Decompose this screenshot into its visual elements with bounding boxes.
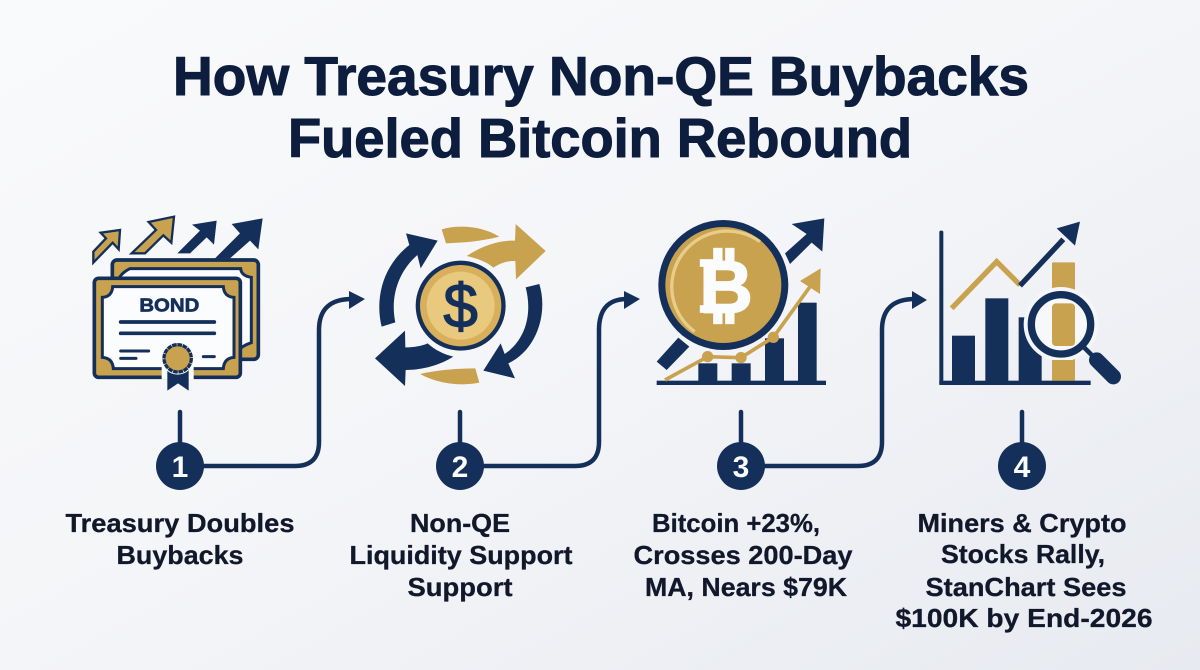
label: step 2: Non-QE	[410, 508, 510, 538]
icon: money cycle around dollar coin	[375, 224, 546, 386]
label: step 1: Treasury Doubles	[66, 508, 294, 538]
icon: bond certificates with rising arrows	[93, 217, 263, 391]
step badge 3: 3	[733, 451, 749, 484]
label: step 4: $100K by End-2026	[896, 603, 1152, 633]
label: step 3: Crosses 200-Day	[634, 540, 853, 570]
connector arrow: step 1 to step 2	[180, 291, 365, 466]
label: step 3	[634, 508, 853, 602]
step badge 4	[998, 442, 1046, 490]
label: step 4: Miners & Crypto	[918, 508, 1126, 538]
label: step 2: Liquidity Support	[350, 540, 573, 570]
label: step 1: Buybacks	[116, 540, 244, 570]
label: step 3: Bitcoin +23%,	[652, 508, 820, 538]
title: Fueled Bitcoin Rebound	[288, 107, 912, 169]
label: step 1	[66, 508, 294, 570]
label: step 3: MA, Nears $79K	[645, 572, 847, 602]
icon: bond certificates with rising arrows: BOND	[139, 295, 199, 316]
step badge 1: 1	[172, 451, 188, 484]
label: step 4	[896, 508, 1152, 633]
title: How Treasury Non-QE Buybacks	[173, 45, 1029, 107]
icon: bitcoin coin with rising chart: B	[699, 246, 753, 329]
label: step 2	[350, 508, 573, 602]
label: step 4: Stocks Rally,	[941, 539, 1105, 569]
step badge 2	[436, 442, 484, 490]
label: step 2: Support	[408, 572, 513, 602]
icon: bitcoin coin with rising chart	[657, 218, 826, 385]
title	[173, 45, 1029, 169]
step badge 1	[156, 442, 204, 490]
icon: money cycle around dollar coin: $	[443, 272, 478, 341]
connector stub: step 4	[1020, 412, 1024, 445]
connector arrow: step 2 to step 3	[460, 291, 640, 466]
label: step 4: StanChart Sees	[926, 572, 1126, 602]
step badge 4: 4	[1014, 451, 1031, 484]
step badge 2: 2	[452, 451, 468, 484]
icon: bar chart with magnifying glass	[939, 222, 1113, 385]
step badge 3	[717, 442, 765, 490]
connector arrow: step 3 to step 4	[741, 291, 927, 466]
